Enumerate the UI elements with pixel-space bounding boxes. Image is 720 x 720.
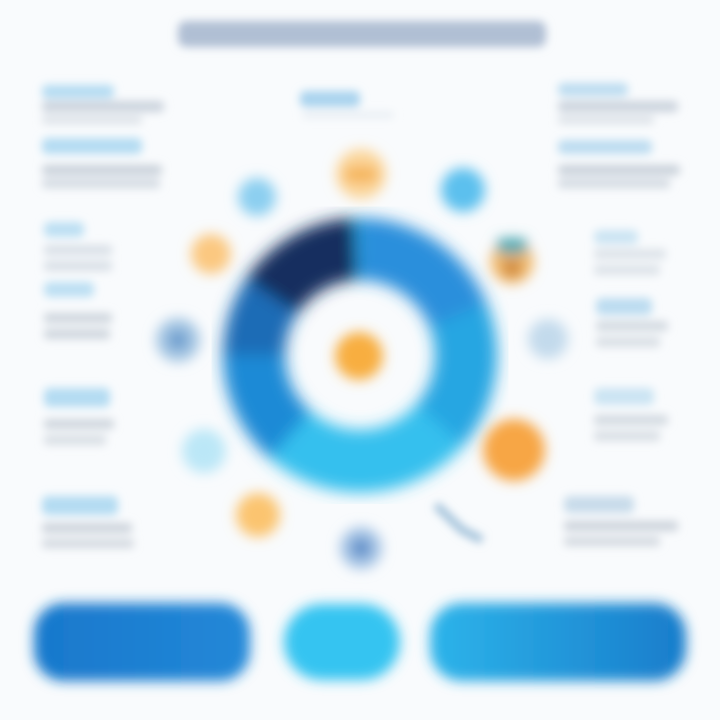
icon: lower right orange — [483, 419, 545, 481]
donut chart — [254, 249, 466, 461]
text block: left 4 — [44, 282, 112, 339]
text block: right 5 — [594, 388, 668, 441]
icon: upper left blue — [238, 178, 276, 216]
icon: left orange — [191, 234, 231, 274]
icon: top orange — [336, 149, 386, 199]
title — [178, 21, 546, 47]
text block: top centre — [300, 91, 394, 118]
icon: lower left light blue — [182, 429, 226, 473]
button: left pill — [34, 603, 250, 681]
icon: bottom blue — [340, 527, 382, 569]
button: right pill — [430, 603, 686, 681]
button: centre pill — [284, 604, 400, 680]
text block: left 2 — [42, 138, 162, 188]
icon: upper right blue — [441, 168, 485, 212]
text block: left 3 — [44, 222, 112, 271]
icon: right multicolour — [490, 238, 534, 284]
icon: right pale blue — [528, 319, 568, 359]
text block: left 6 — [42, 496, 134, 548]
icon: bottom right chart — [436, 505, 482, 540]
text block: left 5 — [44, 388, 114, 445]
text block: right 1 — [558, 83, 678, 124]
text block: right 4 — [596, 298, 668, 347]
text block: left 1 — [42, 85, 164, 124]
text block: right 3 — [594, 230, 666, 275]
icon: bottom left orange — [236, 493, 280, 537]
icon: centre orange — [335, 332, 383, 380]
text block: right 2 — [558, 140, 680, 188]
icon: left blue — [156, 318, 200, 362]
text block: right 6 — [564, 496, 678, 546]
